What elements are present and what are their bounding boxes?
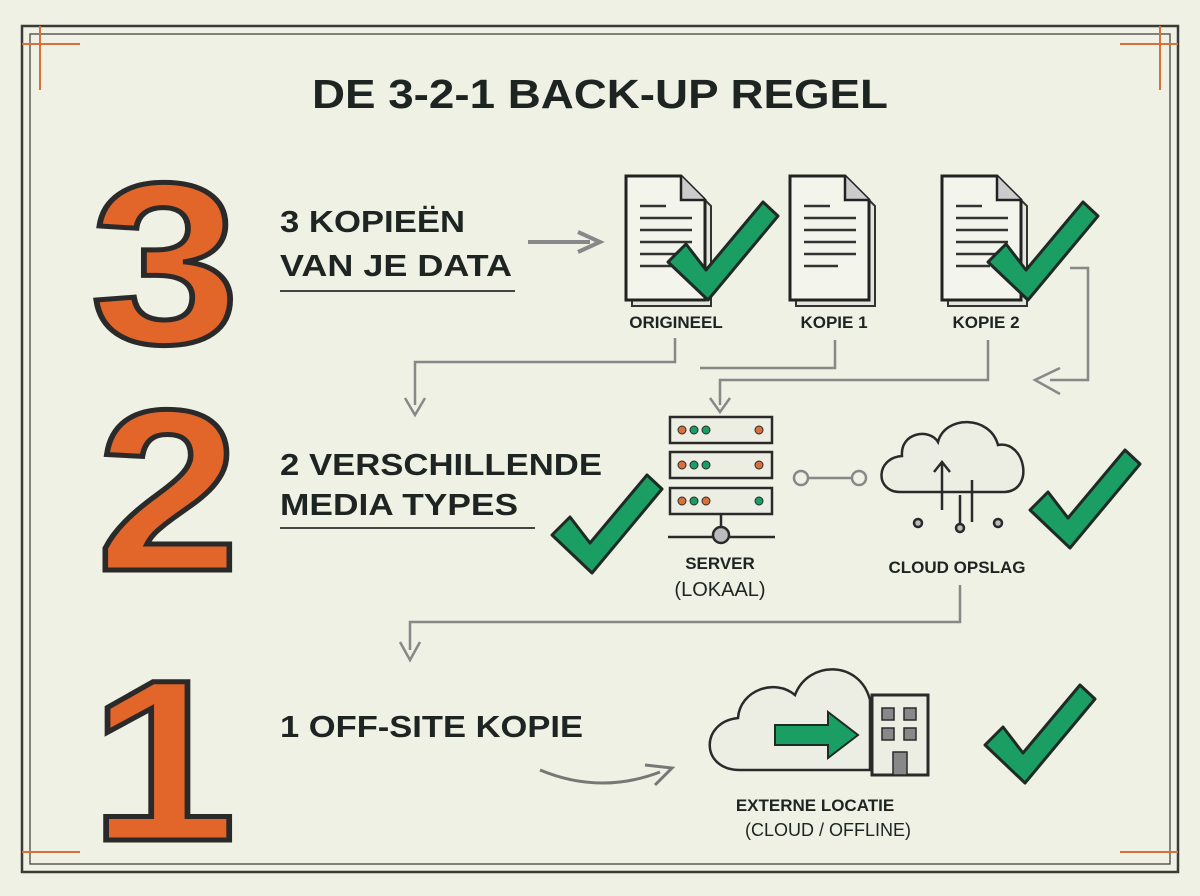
title: DE 3-2-1 BACK-UP REGEL <box>312 71 888 117</box>
check row 2 <box>552 475 662 573</box>
number 2: 2 <box>96 362 240 619</box>
documents with checks <box>626 176 1098 306</box>
arrow to documents <box>528 232 600 252</box>
offsite label: (CLOUD / OFFLINE) <box>745 820 911 840</box>
text: 1 offsite <box>280 709 672 785</box>
text: 2 media <box>280 447 602 528</box>
check cloud <box>1030 450 1140 548</box>
text: 2 media: MEDIA TYPES <box>280 487 518 522</box>
document labels: KOPIE 2 <box>952 313 1020 332</box>
offsite label <box>736 796 911 840</box>
connector arrows <box>400 268 1088 660</box>
connector link <box>794 471 866 485</box>
number 3: 3 <box>90 135 240 393</box>
server label: (LOKAAL) <box>674 579 766 601</box>
cloud label: CLOUD OPSLAG <box>889 558 1025 577</box>
offsite label: EXTERNE LOCATIE <box>736 796 894 815</box>
server label: SERVER <box>685 554 755 573</box>
document labels: KOPIE 1 <box>800 313 868 332</box>
check offsite <box>985 685 1095 783</box>
text: 3 copies: VAN JE DATA <box>280 248 512 283</box>
document labels <box>629 313 1020 332</box>
document labels: ORIGINEEL <box>629 313 723 332</box>
number 1: 1 <box>89 632 237 889</box>
icon: server <box>668 417 775 543</box>
icon: cloud with arrow and building <box>710 669 928 775</box>
text: 1 offsite: 1 OFF-SITE KOPIE <box>280 709 583 744</box>
server label <box>674 554 766 601</box>
text: 3 copies: 3 KOPIEËN <box>280 204 465 239</box>
text: 3 copies <box>280 204 515 291</box>
text: 2 media: 2 VERSCHILLENDE <box>280 447 602 482</box>
icon: cloud <box>881 422 1023 532</box>
